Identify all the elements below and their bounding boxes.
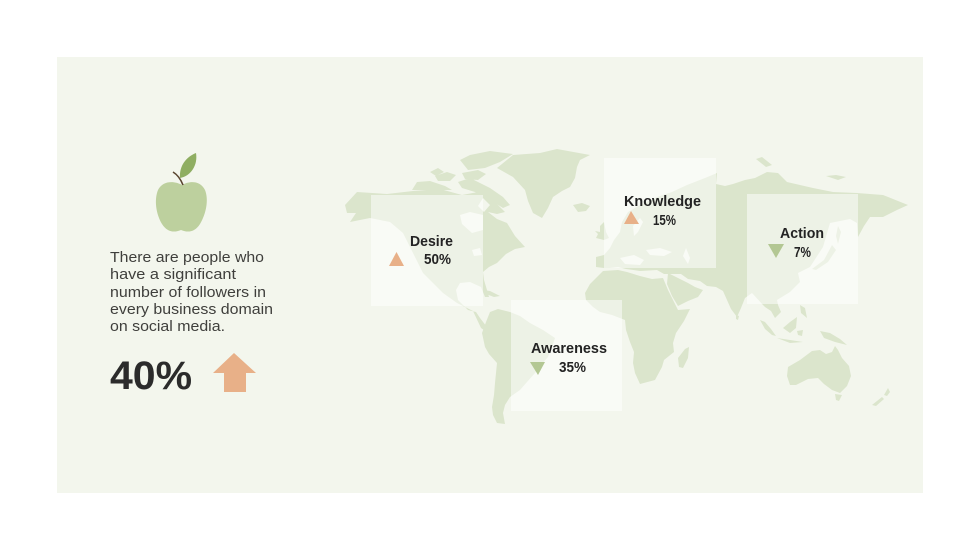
body text: have a significant — [110, 266, 237, 283]
icon: up arrow — [213, 353, 256, 392]
label: Knowledge: 15% — [653, 213, 676, 229]
label: Desire: Desire — [410, 234, 453, 250]
Madagascar — [678, 347, 689, 368]
North America — [345, 189, 525, 336]
label: Knowledge — [624, 194, 701, 229]
Cuba and Caribbean — [483, 290, 500, 297]
world map — [345, 149, 908, 424]
UK and Ireland — [595, 222, 609, 240]
label: Desire: 50% — [424, 252, 451, 268]
icon: green apple — [156, 153, 207, 232]
South America — [482, 309, 555, 424]
body text: number of followers in — [110, 284, 266, 301]
label: Action: 7% — [794, 245, 811, 261]
Arabian Peninsula — [667, 273, 703, 306]
body text: every business domain — [110, 301, 273, 318]
label: Action: Action — [780, 226, 824, 242]
label: Awareness: Awareness — [531, 341, 607, 357]
label: Awareness — [530, 341, 607, 376]
translucent panel: Awareness — [511, 300, 622, 411]
Svalbard and Arctic Russia islands — [756, 157, 846, 180]
label: Action — [768, 226, 824, 261]
Iceland — [573, 203, 590, 212]
Southeast Asia islands — [760, 305, 847, 345]
body text — [110, 249, 273, 335]
big statistic: 40% — [110, 354, 192, 398]
Eurasia — [596, 172, 908, 318]
Greenland — [497, 149, 590, 218]
translucent panel: Desire — [371, 195, 483, 306]
label: Desire — [389, 234, 453, 268]
background panel — [57, 57, 923, 493]
body text: on social media. — [110, 318, 225, 335]
label: Knowledge: Knowledge — [624, 194, 701, 210]
label: Awareness: 35% — [559, 360, 586, 376]
Canadian arctic islands — [412, 151, 513, 208]
body text: There are people who — [110, 249, 264, 266]
Australia — [787, 346, 851, 393]
Sri Lanka — [736, 315, 739, 320]
translucent panel: Action — [747, 194, 858, 304]
inland seas and lakes — [460, 198, 690, 265]
Africa — [585, 270, 690, 384]
Japan and Sakhalin — [812, 226, 841, 270]
translucent panel: Knowledge — [604, 158, 716, 268]
New Zealand — [872, 388, 890, 406]
Tasmania — [835, 394, 842, 401]
